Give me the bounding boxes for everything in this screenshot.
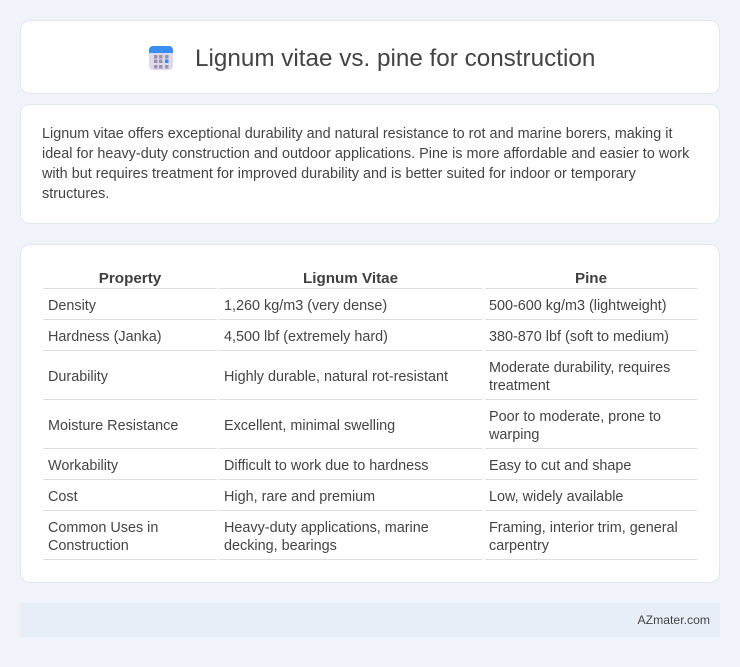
row: workability: Difficult to work due to hardness: [224, 458, 429, 474]
row: cost: Cost: [48, 489, 78, 505]
table header: [99, 270, 607, 287]
row: density: [48, 298, 667, 314]
row: hardness: 380-870 lbf (soft to medium): [489, 329, 669, 345]
row: common uses: Common Uses in: [48, 520, 158, 536]
panel: summary: [20, 104, 720, 224]
footer credit: AZmater.com: [638, 613, 710, 627]
row: durability: [48, 360, 670, 394]
table header: Property: [99, 270, 161, 287]
row: cost: [48, 489, 623, 505]
row: common uses: carpentry: [489, 538, 549, 554]
footer bar: [20, 603, 720, 637]
table header: Pine: [575, 270, 607, 287]
row: hardness: [48, 329, 669, 345]
row: cost: High, rare and premium: [224, 489, 375, 505]
row: common uses: Construction: [48, 538, 129, 554]
row: workability: Easy to cut and shape: [489, 458, 631, 474]
row: durability: Highly durable, natural rot-resistant: [224, 369, 448, 385]
panel: comparison table: [20, 244, 720, 583]
summary text: with but requires treatment for improved durability and is better suited for indoor or temporary: [42, 166, 636, 182]
row: hardness: Hardness (Janka): [48, 329, 162, 345]
row: moisture resistance: Moisture Resistance: [48, 418, 178, 434]
row: workability: Workability: [48, 458, 118, 474]
summary text: ideal for heavy-duty construction and outdoor applications. Pine is more affordable and easier to work: [42, 146, 689, 162]
row: durability: Moderate durability, requires: [489, 360, 670, 376]
row: cost: Low, widely available: [489, 489, 623, 505]
row: common uses: Heavy-duty applications, marine: [224, 520, 429, 536]
row: durability: Durability: [48, 369, 108, 385]
summary text: Lignum vitae offers exceptional durability and natural resistance to rot and marine borers, making it: [42, 126, 672, 142]
row: durability: treatment: [489, 378, 550, 394]
table header: Lignum Vitae: [303, 270, 398, 287]
panel: title: [20, 20, 720, 94]
row: moisture resistance: Poor to moderate, prone to: [489, 409, 661, 425]
row: hardness: 4,500 lbf (extremely hard): [224, 329, 388, 345]
summary text: [42, 126, 690, 202]
summary text: structures.: [42, 186, 109, 202]
row: common uses: [48, 520, 678, 554]
row: common uses: decking, bearings: [224, 538, 337, 554]
icon: calendar: [149, 46, 173, 70]
row: density: 500-600 kg/m3 (lightweight): [489, 298, 667, 314]
row: workability: [48, 458, 631, 474]
row: common uses: Framing, interior trim, general: [489, 520, 678, 536]
row: moisture resistance: Excellent, minimal swelling: [224, 418, 395, 434]
row: moisture resistance: [48, 409, 661, 443]
row: density: Density: [48, 298, 96, 314]
row: density: 1,260 kg/m3 (very dense): [224, 298, 387, 314]
row: moisture resistance: warping: [489, 427, 539, 443]
title text: Lignum vitae vs. pine for construction: [195, 45, 595, 72]
